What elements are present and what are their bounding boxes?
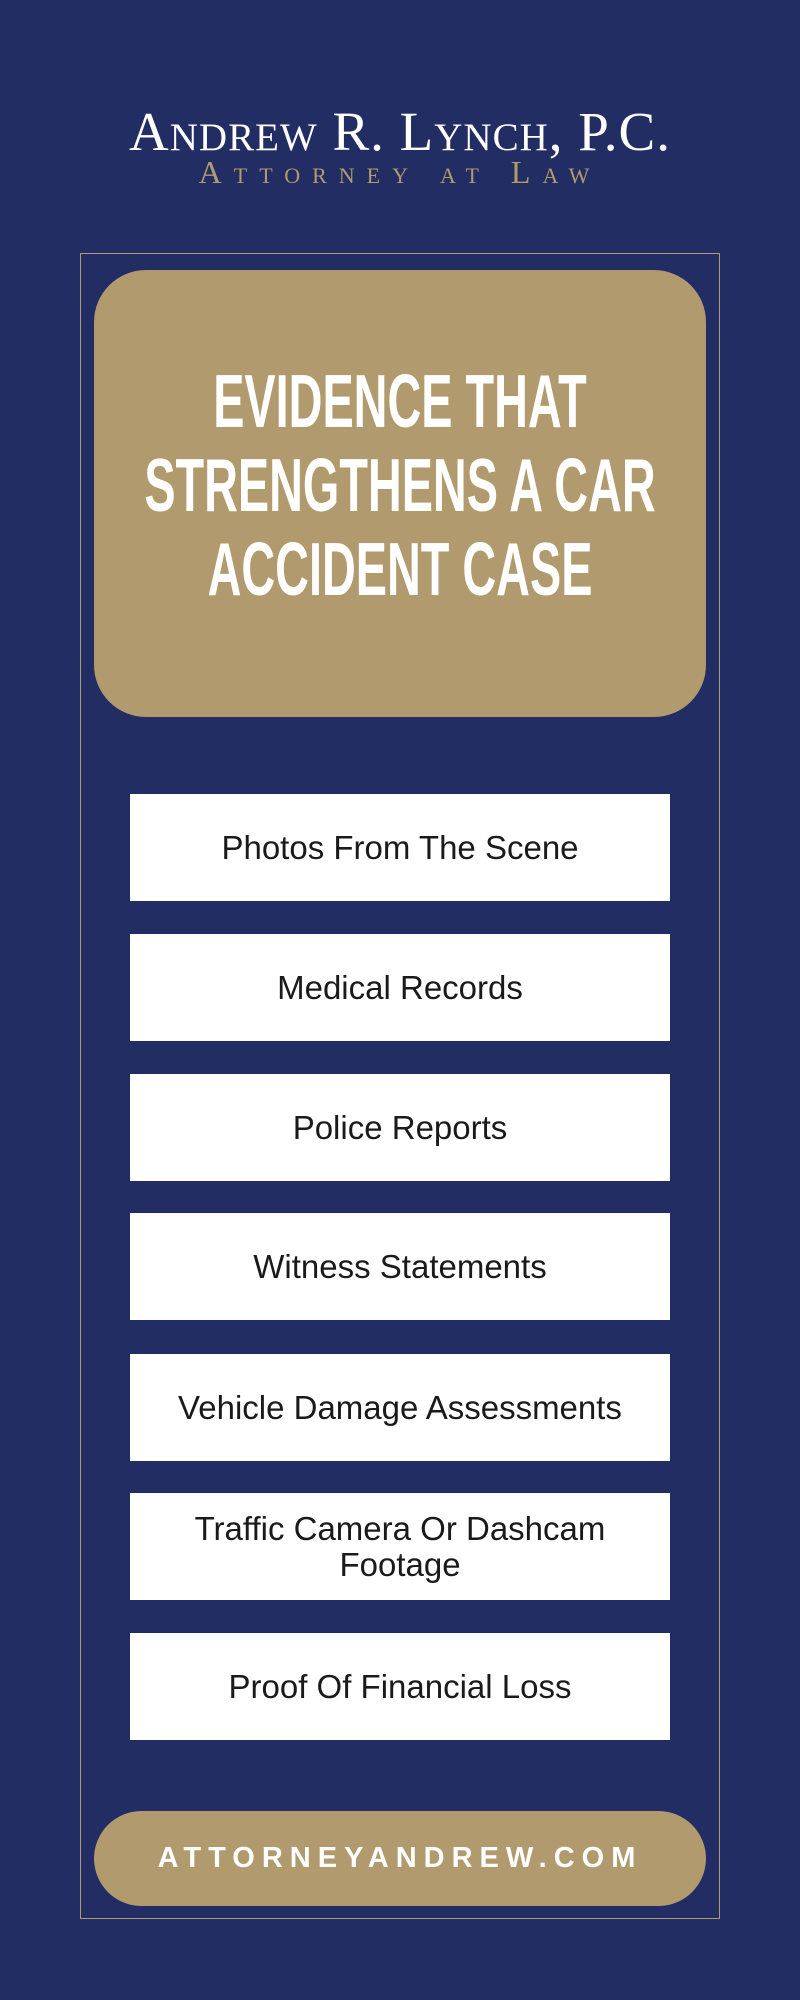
item: witness statements: Witness Statements [253,1248,547,1284]
item: financial loss [130,1633,670,1740]
logo: tagline: Attorney at Law [199,154,601,190]
item: traffic camera: Traffic Camera Or Dashcam Footage [195,1510,605,1582]
item: vehicle damage: Vehicle Damage Assessments [178,1388,622,1426]
title [144,358,656,610]
website button [94,1811,706,1906]
item: medical records [130,934,670,1041]
item: traffic camera [130,1493,670,1600]
website button: ATTORNEYANDREW.COM [158,1842,642,1874]
title: STRENGTHENS A CAR [144,442,656,526]
title panel [94,270,706,717]
item: photos: Photos From The Scene [221,828,579,866]
item: witness statements [130,1213,670,1320]
item: police reports [130,1074,670,1181]
item: financial loss: Proof Of Financial Loss [228,1668,572,1704]
item: vehicle damage [130,1354,670,1461]
frame border [80,253,720,1919]
title: ACCIDENT CASE [208,526,592,610]
logo: firm name: Andrew R. Lynch, P.C. [129,101,671,162]
item: medical records: Medical Records [277,968,523,1006]
item: police reports: Police Reports [293,1108,507,1146]
title: EVIDENCE THAT [213,358,587,442]
item: photos [130,794,670,901]
